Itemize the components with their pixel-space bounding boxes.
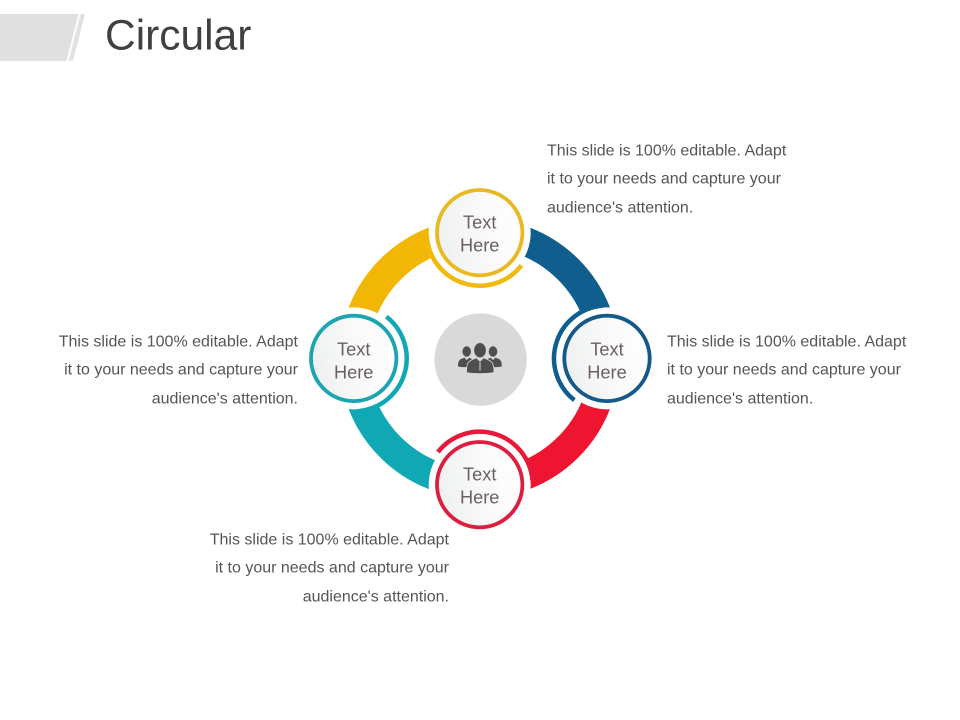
text block: top right: [547, 142, 787, 216]
title banner: [0, 14, 85, 61]
node: bottom red: [437, 432, 532, 527]
text block: top right: it to your needs and capture your: [547, 170, 782, 188]
text block: left: it to your needs and capture your: [64, 362, 299, 378]
text block: bottom: audience's attention.: [303, 588, 449, 606]
text block: right: audience's attention.: [667, 390, 813, 408]
text block: bottom: This slide is 100% editable. Adapt: [210, 532, 450, 548]
text block: top right: audience's attention.: [547, 200, 693, 216]
text block: bottom: [210, 532, 450, 606]
text block: right: This slide is 100% editable. Adapt: [667, 334, 907, 350]
ring segment: blue: [479, 233, 605, 358]
node: bottom red: Here: [460, 488, 499, 508]
node: right blue: Here: [587, 362, 627, 382]
node: top yellow: Text: [463, 212, 496, 232]
node: left teal: [311, 316, 407, 411]
node: top yellow: Here: [460, 236, 499, 256]
text block: right: [667, 334, 907, 408]
ring segment: teal: [354, 358, 479, 484]
node: top yellow: [427, 190, 522, 286]
icon: business team: [458, 343, 502, 374]
text block: left: audience's attention.: [152, 390, 298, 408]
circular ring diagram: [303, 182, 658, 536]
center circle: [434, 313, 527, 406]
title: Circular: [105, 12, 251, 60]
node: bottom red: Text: [463, 464, 496, 484]
text block: top right: This slide is 100% editable. Adapt: [547, 142, 787, 160]
text block: left: This slide is 100% editable. Adapt: [59, 334, 299, 350]
node: right blue: [554, 306, 650, 401]
text block: bottom: it to your needs and capture your: [215, 560, 450, 576]
text block: left: [59, 334, 299, 408]
node gaps: [303, 182, 658, 536]
node: right blue: Text: [590, 340, 624, 360]
node: left teal: Here: [334, 362, 373, 382]
ring segment: yellow: [354, 233, 479, 358]
text block: right: it to your needs and capture your: [667, 362, 902, 378]
ring segment: red: [479, 358, 605, 484]
node: left teal: Text: [337, 340, 370, 360]
